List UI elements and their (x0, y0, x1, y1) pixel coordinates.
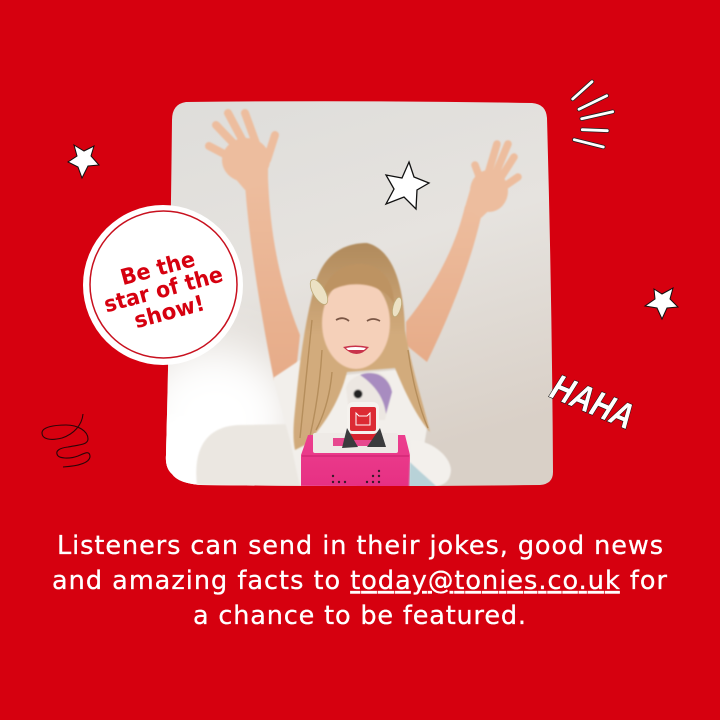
icon: spiral squiggle (42, 414, 90, 467)
badge text: star of the (101, 263, 226, 318)
photo wall backdrop (166, 101, 553, 486)
icon: star right (645, 288, 678, 319)
girl's hair (293, 243, 430, 450)
badge text: Be the (118, 247, 198, 291)
icon: star on photo (386, 162, 429, 209)
panel: photo of girl with raised arms (166, 101, 553, 486)
body text (52, 531, 668, 631)
body text: Listeners can send in their jokes, good news (57, 531, 663, 561)
body text: a chance to be featured. (193, 601, 526, 631)
body text: and amazing facts to today@tonies.co.uk for (52, 566, 668, 596)
girl's face (321, 282, 394, 370)
girl's raised arm, left (209, 113, 300, 380)
callout: badge (83, 205, 243, 365)
unicorn plush toy (346, 372, 392, 420)
pink audio box (301, 433, 410, 490)
icon: burst lines (573, 82, 613, 147)
hair clips (310, 279, 402, 317)
girl's raised arm, right (406, 144, 518, 362)
unicorn tail and chair at right (409, 440, 451, 487)
girl's t-shirt (273, 360, 427, 487)
badge text (96, 241, 232, 340)
badge text: show! (132, 291, 208, 334)
toy figurine with red card (342, 402, 386, 448)
icon: haha comic text: HAHA (545, 366, 640, 437)
icon: star top left (68, 145, 99, 178)
